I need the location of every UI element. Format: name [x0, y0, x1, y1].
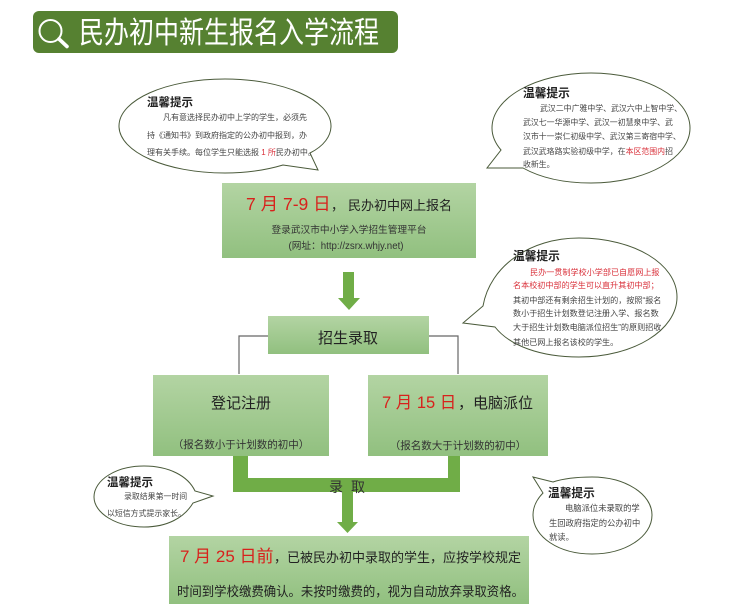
callout: top left tip	[119, 79, 331, 173]
callout: top right tip	[487, 73, 690, 183]
icon: magnifying glass	[40, 20, 67, 46]
label: enrollment: 录 取	[329, 479, 365, 495]
box: computer allocation: ，	[458, 395, 473, 412]
box: online registration	[222, 183, 476, 258]
box: online registration: 登录武汉市中小学入学招生管理平台	[272, 223, 426, 236]
box: registration	[153, 375, 329, 456]
box: computer allocation: （报名数大于计划数的初中）	[390, 439, 526, 452]
box: payment confirmation: 时间到学校缴费确认。未按时缴费的，视为自动放弃录取资格。	[177, 584, 524, 599]
box: payment confirmation	[169, 536, 529, 604]
box: online registration: 民办初中网上报名	[348, 198, 452, 213]
arrow: merge to enrollment	[233, 456, 460, 533]
box: registration: （报名数小于计划数的初中）	[173, 438, 309, 451]
box: online registration: ，	[331, 198, 344, 213]
callout: top left tip: 凡有意选择民办初中上学的学生，必须先	[163, 112, 307, 122]
callout: computer allocation tip: 电脑派位未录取的学	[565, 503, 640, 513]
callout: top right tip: 温馨提示	[523, 86, 570, 100]
callout: middle right tip: 其他已网上报名该校的学生。	[513, 337, 618, 347]
box: online registration: (网址：http://zsrx.whjy.net)	[288, 239, 404, 252]
box: computer allocation	[368, 375, 548, 456]
title bar	[33, 11, 398, 53]
callout: computer allocation tip: 生回政府指定的公办初中	[549, 518, 640, 528]
callout: middle right tip: 数小于招生计划数登记注册入学、报名数	[513, 308, 659, 318]
box: payment confirmation: 已被民办初中录取的学生，应按学校规定	[287, 550, 521, 565]
box: admission	[268, 316, 429, 354]
callout: middle right tip: 名本校初中部的学生可以直升其初中部；	[513, 280, 659, 290]
callout: top right tip: 武汉七一华源中学、武汉一初慧泉中学、武	[523, 117, 673, 127]
box: payment confirmation: ，	[274, 550, 287, 565]
callout: middle right tip: 其初中部还有剩余招生计划的，按照“报名	[513, 295, 661, 305]
callout: computer allocation tip	[533, 477, 652, 554]
box: computer allocation: 电脑派位	[473, 395, 533, 412]
callout: top right tip: 武汉二中广雅中学、武汉六中上智中学、	[540, 103, 682, 113]
box: admission: 招生录取	[318, 330, 378, 347]
callout: top left tip: 持《通知书》到政府指定的公办初中报到，办	[147, 130, 307, 140]
callout: middle right tip: 温馨提示	[513, 249, 560, 263]
arrow: registration to admission	[338, 272, 360, 310]
callout: top right tip: 收新生。	[523, 159, 555, 169]
connector lines	[239, 336, 458, 374]
callout: top left tip: 理有关手续。每位学生只能选报 1 所民办初中。	[147, 147, 316, 157]
callout: computer allocation tip: 温馨提示	[548, 486, 595, 500]
callout: sms tip	[94, 466, 213, 527]
box: registration: 登记注册	[211, 395, 271, 412]
callout: middle right tip: 大于招生计划数电脑派位招生”的原则招收	[513, 322, 661, 332]
box: online registration: 7 月 7-9 日	[246, 194, 331, 214]
callout: top right tip: 武汉武珞路实验初级中学，在本区范围内招	[523, 146, 673, 156]
callout: sms tip: 温馨提示	[107, 475, 153, 489]
box: computer allocation: 7 月 15 日	[382, 394, 456, 412]
title: 民办初中新生报名入学流程	[79, 17, 379, 50]
callout: top right tip: 汉市十一崇仁初级中学、武汉第三寄宿中学、	[523, 131, 681, 141]
callout: computer allocation tip: 就读。	[549, 532, 574, 542]
callout: top left tip: 温馨提示	[147, 95, 193, 109]
callout: middle right tip: 民办一贯制学校小学部已自愿网上报	[530, 267, 660, 277]
callout: sms tip: 录取结果第一时间	[124, 491, 187, 501]
callout: middle right tip	[463, 238, 677, 357]
callout: sms tip: 以短信方式提示家长。	[107, 508, 186, 518]
box: payment confirmation: 7 月 25 日前	[180, 547, 274, 566]
